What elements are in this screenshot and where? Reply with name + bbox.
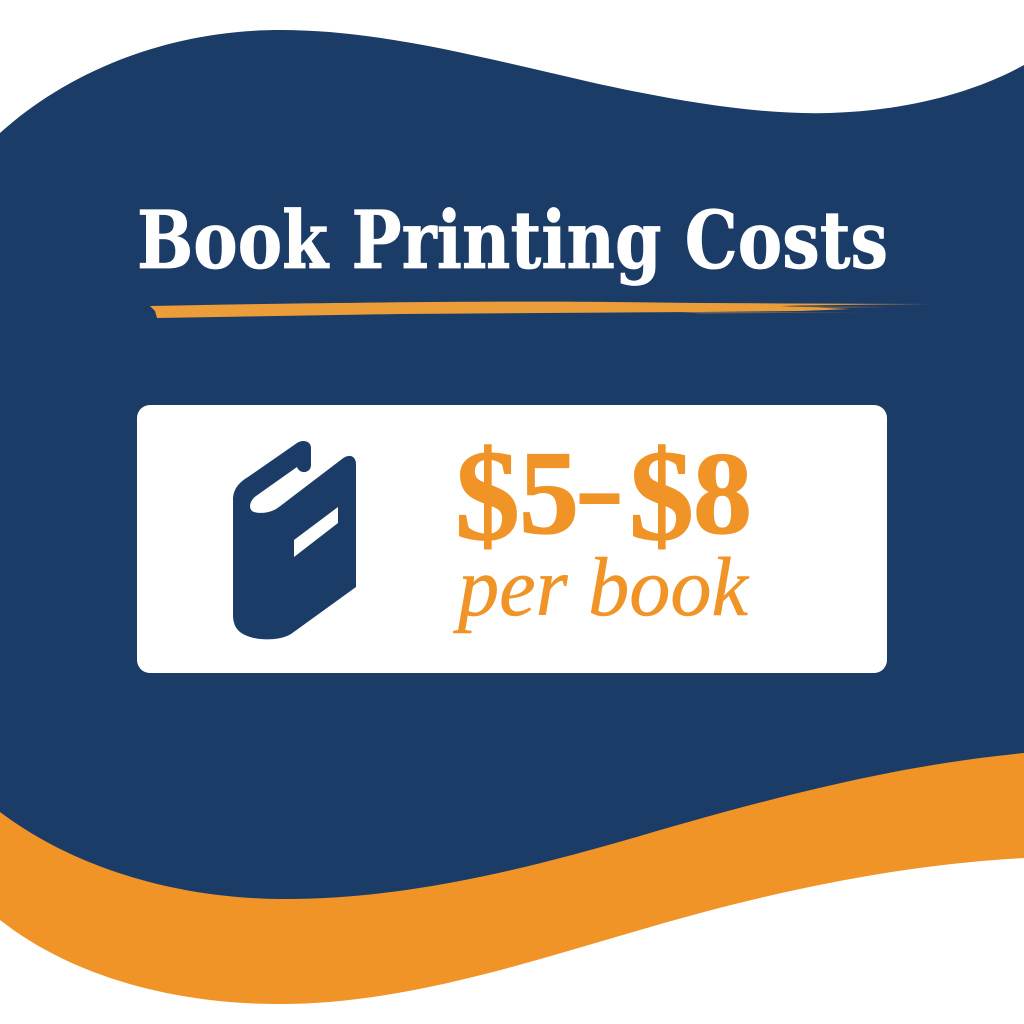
per book: per book xyxy=(453,541,750,634)
price: $ xyxy=(629,424,694,568)
brush underline xyxy=(150,302,930,318)
icon: book xyxy=(233,441,356,639)
price card xyxy=(137,405,887,673)
price: 8 xyxy=(693,428,752,559)
title: Book Printing Costs xyxy=(137,193,888,287)
price: $ xyxy=(455,424,520,568)
orange wave band xyxy=(0,740,1024,1004)
card background xyxy=(137,405,887,673)
price: 5 xyxy=(519,426,579,559)
price: – xyxy=(582,456,617,529)
